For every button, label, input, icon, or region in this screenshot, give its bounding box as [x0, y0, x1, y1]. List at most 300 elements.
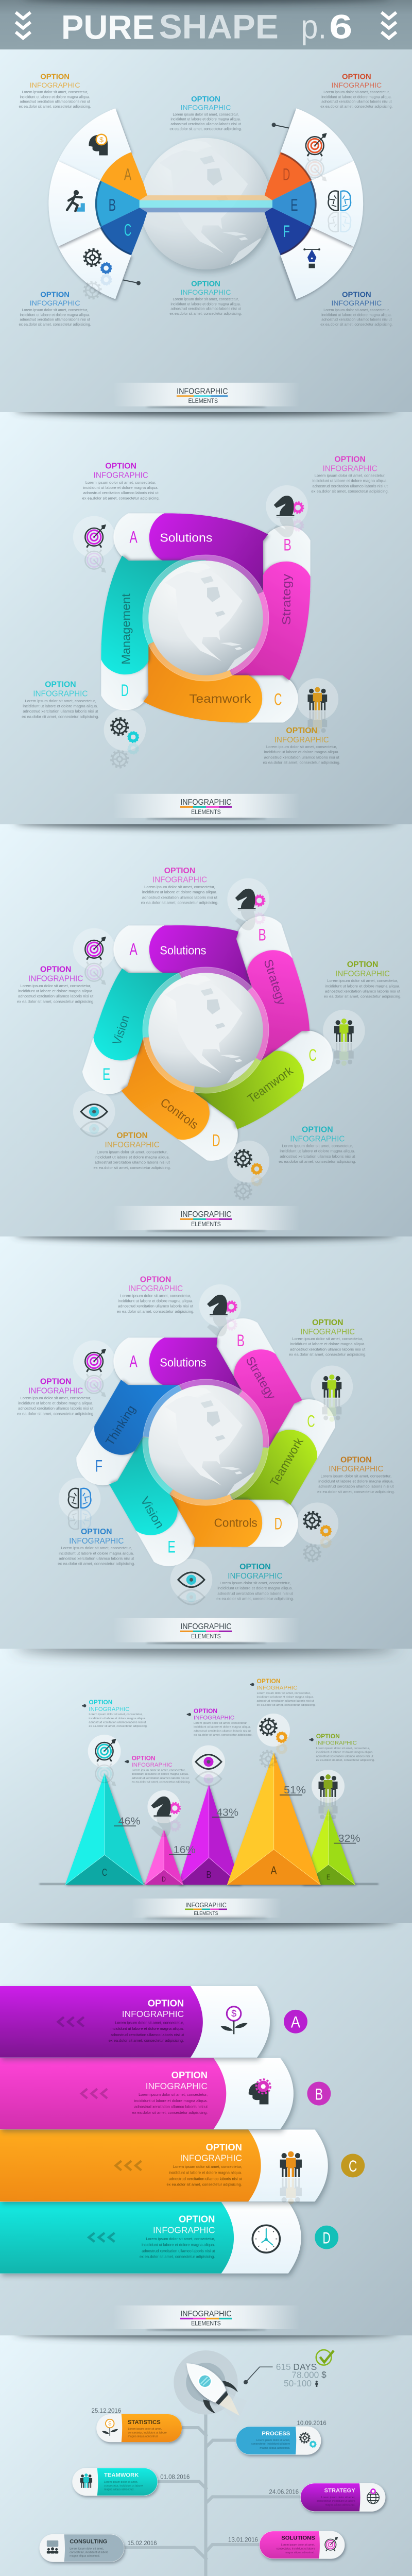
letter B: B: [206, 1870, 211, 1880]
letter badge B: B: [315, 2084, 323, 2103]
pill: consulting: consectetur, incididunt ut labore: [70, 2551, 108, 2554]
text: OPTION: [179, 2214, 215, 2225]
baseline shadow: [40, 1883, 379, 1885]
text block: green: INFOGRAPHIC: [316, 1740, 357, 1747]
icon: knight circle: [147, 1790, 180, 1837]
text block: teal: ex ea.dolor sit amet, consectetur adipisicing.: [89, 1725, 148, 1728]
icon: gears: [84, 249, 111, 298]
letter A: A: [130, 528, 138, 547]
ribbon label Strategy: Strategy: [261, 958, 289, 1007]
text block: purple option: ex ea.dolor sit amet, consectetur adipisicing.: [82, 496, 160, 500]
icon: gears circle: [257, 1714, 290, 1767]
text block: purple: INFOGRAPHIC: [194, 1715, 234, 1721]
letter E: E: [168, 1537, 176, 1556]
pill: teamwork: TEAMWORK: [104, 2472, 139, 2478]
tab E: [127, 1491, 202, 1574]
footer badge: [113, 383, 300, 408]
segment F deep blue: [265, 208, 312, 255]
text block: orange option: ex ea.dolor sit amet, consectetur adipisicing.: [93, 1165, 171, 1170]
text block: bottom right option: incididunt ut labore et dolore magna aliqua.: [321, 313, 391, 317]
icon: knight in circle: [266, 485, 308, 537]
text block: red option: incididunt ut labore et dolore magna aliqua.: [321, 95, 391, 99]
text block: purple: adnostrud xercitation ullamco laboris nisi ut: [194, 1730, 251, 1733]
text block: purple option: incididunt ut labore et dolore magna aliqua.: [18, 989, 93, 993]
text: OPTION: [148, 1998, 184, 2009]
ribbon cycle: [69, 1310, 342, 1574]
text block: purple option: ex ea.dolor sit amet, consectetur adipisicing.: [17, 1411, 94, 1416]
stats text: 78.000 $: [291, 2370, 327, 2380]
pill: process: consectetur, incididunt ut labore: [251, 2443, 290, 2446]
footer badge: INFOGRAPHIC: [180, 2310, 232, 2318]
text block: teal option: ex ea.dolor sit amet, consectetur adipisicing.: [279, 1159, 356, 1164]
ribbon Vision: [89, 954, 220, 1084]
letter D: D: [283, 164, 290, 183]
text block: orange option: [263, 726, 340, 765]
value 16%: 16%: [174, 1844, 196, 1856]
footer badge: [113, 1206, 300, 1231]
connector: rocket stats: [244, 2367, 273, 2384]
icon: eye circle: [192, 1745, 225, 1786]
text block: green: [309, 1733, 375, 1762]
icon: money plant: [221, 2007, 248, 2034]
banner C orange: [0, 2130, 365, 2204]
text block: pink option: OPTION: [140, 1275, 171, 1284]
text block: purple option: OPTION: [40, 1378, 71, 1386]
text block: green: OPTION: [316, 1733, 340, 1740]
text block: teal: incididunt ut labore et dolore magna aliqua.: [89, 1717, 146, 1720]
sector E white: [312, 161, 363, 247]
text block: bottom left option: OPTION: [40, 291, 70, 299]
text block: purple option: adnostrud xercitation ullamco laboris nisi ut: [18, 1406, 94, 1411]
ribbon label Teamwork: Teamwork: [245, 1064, 296, 1106]
text block: orange: incididunt ut labore et dolore magna aliqua.: [256, 1696, 314, 1699]
icon: clock: [252, 2225, 280, 2252]
text block: bottom left option: ex ea.dolor sit amet, consectetur adipisicing.: [19, 323, 91, 327]
text: Lorem ipsum dolor sit amet, consectetur,: [115, 2020, 184, 2025]
tab B: [209, 1310, 285, 1394]
text block: pink option: INFOGRAPHIC: [152, 876, 207, 885]
letter D: D: [274, 1514, 282, 1533]
text: Lorem ipsum dolor sit amet, consectetur,: [173, 2164, 242, 2169]
pill: process: [236, 2427, 321, 2455]
text block: teal: OPTION: [89, 1699, 112, 1706]
icon: target in circle: [73, 928, 115, 985]
text block: orange option: Lorem ipsum dolor sit amet, consectetur,: [266, 744, 337, 749]
icon: knight in circle: [199, 1284, 241, 1336]
text block: blue option: [58, 1528, 135, 1566]
text block: teal option: [279, 1125, 356, 1164]
text block: green option: ex ea.dolor sit amet, consectetur adipisicing.: [324, 994, 401, 999]
text block: purple option: Lorem ipsum dolor sit amet, consectetur,: [85, 480, 156, 485]
text block: green option: adnostrud xercitation ullamco laboris nisi ut: [290, 1347, 366, 1351]
icon: meeting: [47, 2540, 58, 2553]
dates: 01.08.2016: [160, 2473, 190, 2481]
letter badge A: [284, 2010, 307, 2033]
pill: consulting: magna aliqua adnostrud.: [70, 2555, 100, 2558]
ribbon label Strategy: Strategy: [280, 573, 293, 625]
text block: teal: adnostrud xercitation ullamco laboris nisi ut: [89, 1721, 146, 1724]
ribbon label Controls: Controls: [214, 1516, 258, 1529]
text block: purple: ex ea.dolor sit amet, consectetur adipisicing.: [194, 1734, 252, 1737]
ribbon label Controls: Controls: [158, 1095, 201, 1132]
banner A purple: [0, 1986, 307, 2058]
letter D: D: [121, 681, 129, 700]
text block: orange option: adnostrud xercitation ullamco laboris nisi ut: [20, 99, 90, 104]
text block: red option: adnostrud xercitation ullamco laboris nisi ut: [321, 99, 391, 104]
text block: bottom left option: INFOGRAPHIC: [30, 299, 80, 307]
text block: green option: OPTION: [312, 1318, 344, 1327]
text block: orange option: adnostrud xercitation ullamco laboris nisi ut: [95, 1160, 170, 1165]
text: INFOGRAPHIC: [146, 2081, 208, 2091]
text block: top center option: incididunt ut labore et dolore magna aliqua.: [170, 117, 241, 122]
dates: 13.01.2016: [228, 2536, 258, 2544]
panel: pure shape header and split fan diagram: [0, 0, 412, 412]
text block: blue option: OPTION: [81, 1528, 112, 1536]
text block: red option: [320, 73, 392, 109]
letter A: A: [130, 940, 138, 959]
letter E: E: [102, 1064, 110, 1083]
pill: process: magna aliqua adnostrud.: [260, 2447, 290, 2450]
text block: bottom right option: INFOGRAPHIC: [331, 299, 382, 307]
icon: head with dollar: [89, 134, 108, 156]
sector C white: [58, 227, 131, 299]
tab A: [113, 1337, 183, 1385]
pill: solutions: SOLUTIONS: [281, 2535, 315, 2541]
text block: red option: ex ea.dolor sit amet, consectetur adipisicing.: [320, 105, 392, 109]
text block: orange option: Lorem ipsum dolor sit amet, consectetur,: [22, 90, 88, 94]
ribbon Teamwork: [168, 997, 313, 1142]
letter B: B: [259, 925, 266, 944]
text block: top center option: adnostrud xercitation ullamco laboris nisi ut: [170, 122, 241, 126]
ribbon label Teamwork: Teamwork: [267, 1435, 306, 1489]
text block: pink: OPTION: [132, 1755, 156, 1762]
pill: process: PROCESS: [262, 2431, 290, 2437]
text: ex ea.dolor sit amet, consectetur adipisicing.: [140, 2254, 215, 2259]
stats text: 615 DAYS: [276, 2362, 317, 2372]
pyramid A: [227, 1752, 320, 1885]
icon: green checkmark: [316, 2350, 334, 2365]
text block: red option: INFOGRAPHIC: [331, 81, 382, 89]
segment D red orange: [265, 152, 312, 200]
icon: people in circle: [297, 678, 338, 735]
ribbon Teamwork: [144, 618, 262, 723]
text block: teal option: OPTION: [239, 1563, 271, 1571]
pill: solutions: magna aliqua adnostrud.: [285, 2551, 315, 2554]
text block: pink option: [311, 455, 389, 494]
text block: purple: [187, 1707, 252, 1737]
text: OPTION: [206, 2142, 242, 2153]
ribbon Teamwork: [188, 1393, 324, 1526]
ribbon Vision: [97, 1411, 234, 1544]
icon: globe with pin: [367, 2489, 379, 2504]
icon: brain in circle: [59, 1478, 100, 1529]
footer badge: [113, 794, 300, 819]
icon: people: [280, 2151, 302, 2204]
text block: bottom center option: [169, 280, 242, 316]
text block: pink option: adnostrud xercitation ullamco laboris nisi ut: [142, 895, 218, 900]
text: INFOGRAPHIC: [122, 2009, 184, 2019]
footer badge: INFOGRAPHIC: [185, 1901, 227, 1909]
icon: eye in circle: [170, 1559, 212, 1604]
tab A: [113, 513, 183, 561]
text block: orange option: INFOGRAPHIC: [274, 736, 329, 744]
text block: bottom left option: Lorem ipsum dolor sit amet, consectetur,: [22, 308, 88, 312]
text block: purple: OPTION: [194, 1707, 217, 1715]
text block: bottom right option: Lorem ipsum dolor sit amet, consectetur,: [323, 308, 390, 312]
text block: purple option: INFOGRAPHIC: [28, 1387, 83, 1396]
icon: people circle: [312, 1770, 345, 1821]
text block: red option: OPTION: [342, 73, 371, 81]
text block: purple option: INFOGRAPHIC: [28, 975, 83, 984]
ribbon Controls: [107, 1003, 251, 1148]
text block: bottom center option: Lorem ipsum dolor sit amet, consectetur,: [173, 297, 239, 301]
pill: teamwork: magna aliqua adnostrud.: [104, 2488, 134, 2492]
sector A white: [58, 108, 131, 181]
pyramid chart: [40, 1752, 379, 1885]
icon: people in circle: [323, 1010, 365, 1066]
connecting bars across globe: [139, 195, 272, 212]
dates: 15.02.2016: [127, 2539, 157, 2547]
icon: head with flower: [249, 2079, 270, 2104]
text block: orange option: ex ea.dolor sit amet, consectetur adipisicing.: [19, 105, 91, 109]
ribbon Solutions: [149, 1337, 242, 1442]
ribbon Thinking: [87, 1359, 224, 1491]
letter A: A: [271, 1864, 277, 1877]
text block: orange option: OPTION: [40, 73, 70, 81]
ribbon label Vision: Vision: [110, 1013, 132, 1046]
text block: bottom right option: ex ea.dolor sit amet, consectetur adipisicing.: [320, 323, 392, 327]
text block: teal option: INFOGRAPHIC: [290, 1134, 345, 1143]
text block: purple option: incididunt ut labore et dolore magna aliqua.: [83, 485, 159, 490]
text block: purple option: [17, 965, 94, 1004]
footer badge: ELEMENTS: [191, 1633, 221, 1640]
text block: purple: incididunt ut labore et dolore magna aliqua.: [194, 1726, 251, 1729]
icon: chevrons right: [382, 12, 396, 38]
icon: money plant: $: [231, 2008, 236, 2019]
text block: orange option: ex ea.dolor sit amet, consectetur adipisicing.: [317, 1489, 394, 1494]
text block: teal option: Lorem ipsum dolor sit amet, consectetur,: [25, 699, 96, 703]
text block: pink option: Lorem ipsum dolor sit amet, consectetur,: [315, 473, 385, 478]
text block: pink: Lorem ipsum dolor sit amet, consectetur,: [132, 1769, 185, 1772]
text: adnostrud xercitation ullamco laboris nisi ut: [169, 2176, 243, 2181]
text: OPTION: [171, 2070, 208, 2080]
text block: green option: incididunt ut labore et dolore magna aliqua.: [325, 984, 400, 988]
connector dot right: [272, 123, 289, 128]
tab B: [263, 526, 311, 595]
globe inner ring: [143, 555, 269, 681]
text: ex ea.dolor sit amet, consectetur adipisicing.: [132, 2110, 208, 2115]
panel: four stacked banners: [0, 1923, 412, 2335]
letter C: C: [102, 1867, 107, 1878]
text block: teal: [82, 1699, 148, 1728]
letter badge B: [307, 2082, 331, 2106]
text block: green option: OPTION: [347, 960, 378, 969]
ribbon cycle: [78, 910, 342, 1169]
icon: eye in circle: [73, 1091, 115, 1137]
text block: teal option: Lorem ipsum dolor sit amet, consectetur,: [282, 1144, 353, 1148]
segment C navy: [100, 208, 147, 255]
text block: pink option: incididunt ut labore et dolore magna aliqua.: [142, 890, 217, 894]
pill: statistics: Lorem ipsum dolor sit amet,: [128, 2428, 162, 2431]
ribbon label Solutions: Solutions: [160, 1356, 207, 1369]
icon: gears in circle: [104, 709, 146, 767]
text block: pink option: Lorem ipsum dolor sit amet, consectetur,: [120, 1293, 191, 1298]
text block: pink option: adnostrud xercitation ullamco laboris nisi ut: [313, 484, 388, 488]
text block: orange: INFOGRAPHIC: [256, 1685, 298, 1691]
text: adnostrud xercitation ullamco laboris nisi ut: [111, 2032, 184, 2037]
text block: teal option: Lorem ipsum dolor sit amet, consectetur,: [220, 1581, 290, 1585]
text block: teal option: INFOGRAPHIC: [228, 1572, 283, 1581]
text block: bottom right option: OPTION: [342, 291, 371, 299]
text block: pink option: ex ea.dolor sit amet, consectetur adipisicing.: [117, 1309, 194, 1314]
letter B: B: [109, 195, 116, 214]
text block: teal option: INFOGRAPHIC: [33, 690, 88, 699]
pill: consulting: [40, 2534, 124, 2562]
text block: orange option: adnostrud xercitation ullamco laboris nisi ut: [318, 1484, 394, 1489]
text block: pink option: [141, 867, 218, 905]
panel: six part ribbon cycle: [0, 1236, 412, 1649]
text block: green option: ex ea.dolor sit amet, consectetur adipisicing.: [289, 1352, 366, 1357]
footer badge: [131, 1899, 281, 1919]
tab D: [163, 1090, 247, 1169]
text block: bottom center option: incididunt ut labore et dolore magna aliqua.: [170, 302, 241, 306]
text block: blue option: Lorem ipsum dolor sit amet, consectetur,: [61, 1546, 132, 1550]
text block: orange option: OPTION: [286, 726, 317, 735]
text block: green: Lorem ipsum dolor sit amet, consectetur,: [316, 1747, 370, 1750]
text block: blue option: ex ea.dolor sit amet, consectetur adipisicing.: [58, 1562, 135, 1566]
segment E blue: [272, 181, 317, 227]
panel: startup timeline: [0, 2335, 412, 2576]
letter C: C: [124, 221, 131, 240]
tab F: [69, 1410, 145, 1494]
dates: 24.06.2016: [269, 2488, 299, 2496]
letter E: E: [290, 195, 298, 214]
text block: orange option: OPTION: [340, 1455, 372, 1464]
text block: orange: OPTION: [256, 1677, 281, 1685]
letter badge D: [315, 2226, 338, 2249]
pill: consulting: CONSULTING: [70, 2539, 108, 2545]
text block: orange option: ex ea.dolor sit amet, consectetur adipisicing.: [263, 760, 340, 765]
text block: bottom center option: OPTION: [191, 280, 220, 289]
text block: pink option: ex ea.dolor sit amet, consectetur adipisicing.: [141, 901, 218, 905]
footer badge: ELEMENTS: [191, 1221, 221, 1228]
text block: orange: [250, 1677, 316, 1707]
panel: four part ribbon cycle: [0, 412, 412, 824]
pill: statistics: [96, 2414, 182, 2442]
letter C: C: [274, 689, 282, 708]
text block: purple option: INFOGRAPHIC: [94, 471, 148, 480]
text block: orange option: incididunt ut labore et dolore magna aliqua.: [95, 1155, 170, 1159]
tab C: [267, 1391, 342, 1475]
tab C: [258, 1022, 342, 1101]
text block: bottom left option: [19, 291, 91, 327]
footer badge: INFOGRAPHIC: [180, 798, 232, 807]
sector F white: [281, 227, 354, 299]
tab E: [78, 1020, 144, 1100]
text: ex ea.dolor sit amet, consectetur adipisicing.: [109, 2038, 184, 2043]
text block: orange option: OPTION: [116, 1131, 148, 1140]
icon: target in circle: [73, 516, 115, 573]
pyramid B: [178, 1784, 241, 1885]
title: PURESHAPE p.6: p.: [301, 8, 327, 46]
pill: consulting: Lorem ipsum dolor sit amet,: [70, 2547, 104, 2550]
text block: orange option: INFOGRAPHIC: [105, 1141, 160, 1149]
text: adnostrud xercitation ullamco laboris nisi ut: [134, 2105, 208, 2109]
pill: teamwork: consectetur, incididunt ut labore: [104, 2484, 143, 2487]
text block: green: ex ea.dolor sit amet, consectetur adipisicing.: [316, 1759, 375, 1762]
value 43%: 43%: [216, 1807, 238, 1818]
text block: pink option: incididunt ut labore et dolore magna aliqua.: [313, 479, 388, 483]
text block: pink option: incididunt ut labore et dolore magna aliqua.: [118, 1299, 193, 1303]
text block: orange option: [19, 73, 91, 109]
text block: teal option: adnostrud xercitation ullamco laboris nisi ut: [217, 1591, 293, 1596]
footer badge: ELEMENTS: [191, 2320, 221, 2327]
text: [167, 2142, 243, 2187]
title: PURESHAPE p.6: [61, 8, 352, 47]
text block: green option: [324, 960, 401, 999]
footer badge: INFOGRAPHIC: [180, 1210, 232, 1219]
text block: teal option: adnostrud xercitation ullamco laboris nisi ut: [280, 1154, 355, 1159]
text block: orange option: incididunt ut labore et dolore magna aliqua.: [20, 95, 90, 99]
tab C: [229, 675, 298, 723]
title: PURESHAPE p.6: 6: [329, 8, 352, 46]
pill: strategy: [300, 2483, 385, 2512]
pill: statistics: magna aliqua adnostrud.: [128, 2435, 158, 2438]
text block: bottom right option: adnostrud xercitation ullamco laboris nisi ut: [321, 317, 391, 321]
stats text: 50-100: [284, 2378, 312, 2388]
sector B white: [48, 161, 100, 247]
stats text: [276, 2362, 327, 2388]
dates: 10.09.2016: [297, 2419, 327, 2427]
dates: [86, 2407, 327, 2576]
pill: strategy: Lorem ipsum dolor sit amet,: [321, 2496, 355, 2499]
text block: pink option: INFOGRAPHIC: [128, 1284, 183, 1293]
text block: bottom center option: adnostrud xercitation ullamco laboris nisi ut: [170, 307, 241, 311]
text block: green option: Lorem ipsum dolor sit amet, consectetur,: [292, 1336, 363, 1341]
text block: orange option: [93, 1131, 171, 1170]
text block: blue option: INFOGRAPHIC: [69, 1537, 124, 1546]
text block: blue option: adnostrud xercitation ullamco laboris nisi ut: [59, 1556, 134, 1561]
pill: strategy: magna aliqua adnostrud.: [325, 2504, 355, 2507]
banner B pink: [0, 2058, 331, 2129]
dates: 25.12.2016: [92, 2407, 121, 2414]
footer badge: ELEMENTS: [188, 397, 218, 404]
letter F: F: [283, 222, 290, 241]
title: PURESHAPE p.6: SHAPE: [159, 8, 279, 46]
letter badge A: A: [291, 2013, 301, 2031]
letter A: A: [130, 1352, 138, 1371]
pill: statistics: STATISTICS: [128, 2419, 161, 2426]
header band: [0, 0, 412, 49]
text block: orange option: INFOGRAPHIC: [30, 81, 80, 89]
text: [109, 1998, 184, 2043]
icon: gears in circle: [297, 1502, 338, 1561]
pill: teamwork: [72, 2468, 158, 2496]
text block: teal option: [22, 681, 99, 719]
pill: strategy: STRATEGY: [324, 2488, 355, 2494]
letter badge C: [341, 2154, 365, 2177]
text block: teal: INFOGRAPHIC: [89, 1706, 130, 1713]
pill: statistics: $: [108, 2421, 111, 2427]
text block: green option: INFOGRAPHIC: [335, 970, 390, 978]
ribbon Management: [101, 556, 205, 674]
text block: orange option: incididunt ut labore et dolore magna aliqua.: [318, 1479, 393, 1484]
ribbon label Thinking: Thinking: [103, 1403, 138, 1448]
letter badge D: D: [323, 2228, 331, 2247]
text block: green option: adnostrud xercitation ullamco laboris nisi ut: [325, 989, 401, 994]
ribbon Strategy: [205, 562, 311, 680]
text block: purple option: incididunt ut labore et dolore magna aliqua.: [18, 1401, 93, 1405]
